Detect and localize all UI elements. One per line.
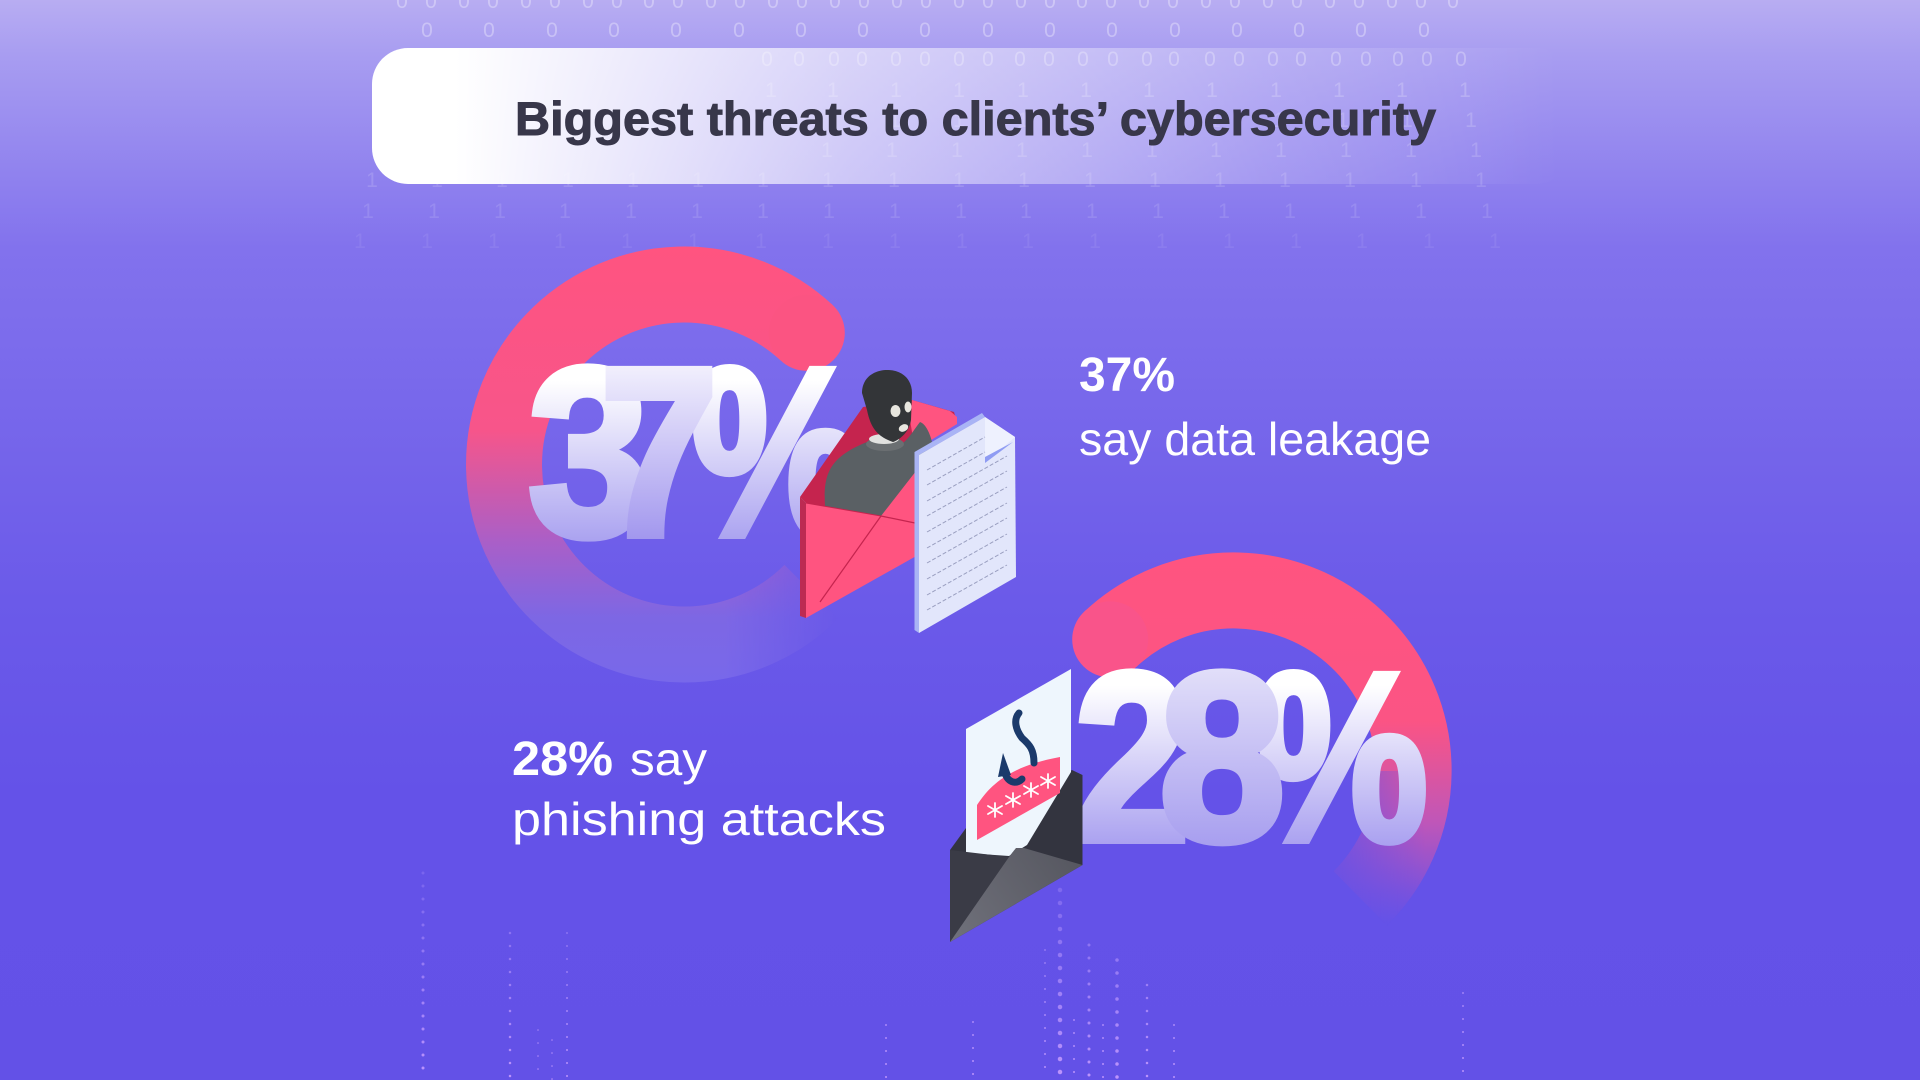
binary pattern: 11111111111 (821, 139, 1482, 162)
big number: 37%: 3 (528, 317, 649, 586)
fishing hook (998, 713, 1034, 782)
binary pattern: 00000000000000000 (421, 19, 1430, 42)
envelope back (800, 400, 957, 522)
big number: 37% (528, 317, 864, 587)
dark envelope back (950, 770, 1082, 942)
big number: 37%: 7 (600, 319, 718, 587)
icon: hacker in red envelope with leaked document (800, 370, 1016, 633)
big number: 28%: 8 (1159, 622, 1285, 891)
text: 28% say phishing attacks: 28% (512, 733, 613, 786)
binary pattern: 111111111111111111 (354, 230, 1501, 253)
binary pattern: 111111111111111111 (366, 169, 1487, 192)
phishing page (966, 669, 1071, 856)
dotted columns (423, 873, 1463, 1080)
big number: 28%: 2 (1074, 622, 1190, 891)
binary pattern: 1111111111 (889, 109, 1477, 132)
icon: phishing envelope with hook (950, 669, 1082, 942)
text: 37% say data leakage: say data leakage (1079, 413, 1431, 465)
envelope front (806, 473, 914, 618)
big number: 28% (1074, 622, 1428, 892)
big number: 28%: % (1255, 624, 1428, 892)
hacker body (825, 422, 932, 522)
document (914, 413, 985, 633)
ring: 37% donut (504, 285, 845, 645)
binary pattern: 111111111111 (765, 79, 1471, 102)
envelope front (950, 848, 1016, 942)
text: 28% say phishing attacks: phishing attacks (512, 793, 886, 845)
binary pattern: 111111111111111111 (362, 200, 1493, 223)
text: 37% say data leakage: 37% (1079, 349, 1175, 402)
binary pattern: 00000000000000000000000 (761, 48, 1467, 71)
title: Biggest threats to clients’ cybersecurity (515, 92, 1436, 145)
header panel (372, 48, 1572, 184)
binary pattern (354, 0, 1501, 253)
big number: 37%: % (691, 319, 864, 587)
ring: 28% donut (1072, 590, 1414, 898)
text: 28% say phishing attacks (512, 733, 886, 845)
password asterisks (988, 774, 1055, 817)
text: 28% say phishing attacks: say (630, 733, 707, 785)
password band (977, 757, 1060, 840)
hacker head (862, 370, 912, 442)
hacker eyes and mouth (890, 402, 912, 433)
text: 37% say data leakage (1079, 349, 1431, 465)
hacker collar (866, 434, 904, 451)
